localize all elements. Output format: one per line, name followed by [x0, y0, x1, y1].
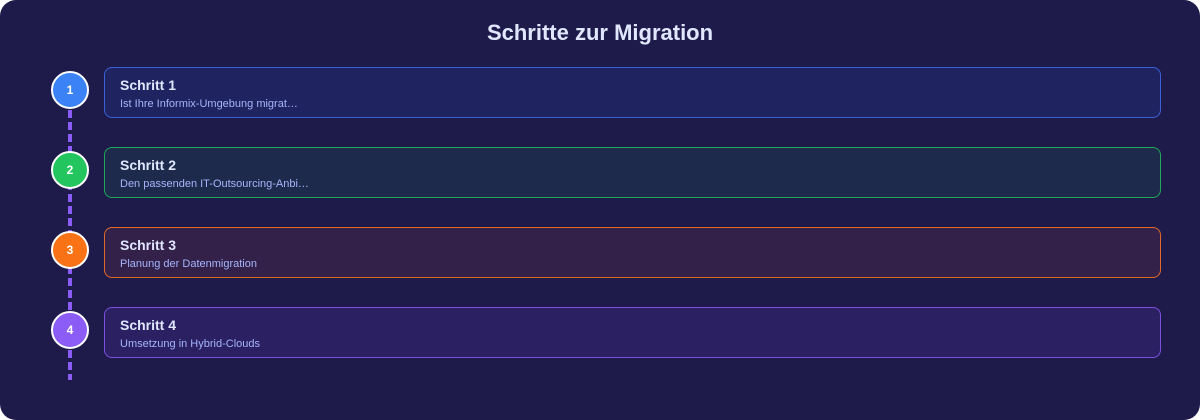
- step 3 circle: 3: [67, 243, 73, 257]
- step 3 card: Planung der Datenmigration: [120, 258, 257, 270]
- step 1 circle: 1: [67, 83, 73, 97]
- step 2 card: Den passenden IT-Outsourcing-Anbi…: [120, 178, 309, 190]
- step 4 circle: 4: [67, 323, 73, 337]
- step 1 circle: [51, 71, 89, 109]
- step 2 circle: [51, 151, 89, 189]
- step 3 circle: [51, 231, 89, 269]
- step 2 circle: 2: [67, 163, 73, 177]
- step 1 card: Schritt 1: [120, 77, 176, 93]
- step 2 card: [104, 147, 1161, 198]
- step 2 card: Schritt 2: [120, 157, 176, 173]
- step 4 card: [104, 307, 1161, 358]
- step 1 card: Ist Ihre Informix-Umgebung migrat…: [120, 98, 298, 110]
- step 4 card: Umsetzung in Hybrid-Clouds: [120, 338, 260, 350]
- step 1 card: [104, 67, 1161, 118]
- title: Schritte zur Migration: [487, 20, 713, 45]
- step 3 card: [104, 227, 1161, 278]
- step 4 circle: [51, 311, 89, 349]
- step 3 card: Schritt 3: [120, 237, 176, 253]
- step 4 card: Schritt 4: [120, 317, 176, 333]
